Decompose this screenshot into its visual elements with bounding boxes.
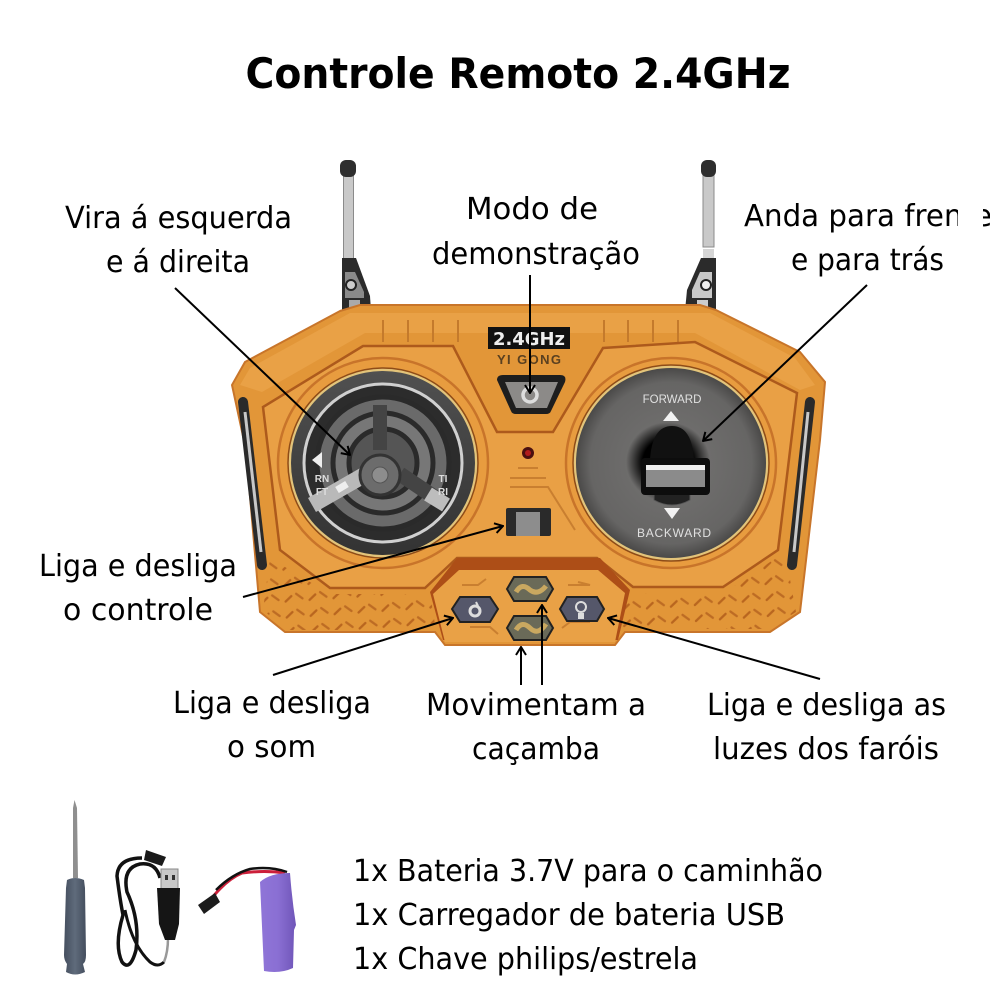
contents list: 1x Carregador de bateria USB [353, 898, 785, 933]
label: demo mode: Modo de [466, 192, 598, 227]
label: demo mode: demonstração [432, 237, 640, 272]
button: sound [452, 597, 498, 622]
right dial [566, 358, 776, 568]
label: bed [426, 688, 646, 767]
label: lights: Liga e desliga as [707, 688, 946, 723]
label: steering: e á direita [106, 245, 250, 280]
right dial: BACKWARD [637, 526, 711, 540]
label: bed: Movimentam a [426, 688, 646, 723]
arrow: demo mode [529, 275, 531, 393]
label: forward and backward: Anda para frente [744, 199, 992, 234]
illustration: remote control [232, 160, 825, 645]
label: lights [707, 688, 946, 767]
icon: usb charger cable [117, 850, 180, 965]
body [232, 305, 825, 645]
contents list: 1x Bateria 3.7V para o caminhão [353, 854, 823, 889]
label: forward and backward: e para trás [791, 243, 944, 278]
label: steering [65, 201, 292, 280]
button: bed up [507, 577, 553, 601]
demo button [497, 375, 565, 414]
left dial: FT [316, 487, 328, 498]
inner plate [263, 342, 797, 588]
display [488, 327, 570, 367]
arrow: power [243, 526, 503, 597]
left dial [278, 358, 488, 568]
display: YI GONG [497, 352, 561, 367]
right side bar [792, 402, 810, 565]
left dial: RN [315, 474, 329, 485]
label: sound: o som [227, 730, 316, 765]
left dial: RI [438, 487, 448, 498]
label: power [39, 549, 237, 628]
top grille marks [383, 320, 678, 342]
right antenna [685, 160, 716, 311]
label: power: Liga e desliga [39, 549, 237, 584]
contents list: 1x Chave philips/estrela [353, 942, 698, 977]
label: forward and backward [744, 198, 992, 278]
arrow: bed lower [520, 647, 522, 685]
icon: screwdriver [64, 800, 86, 974]
arrow: sound [273, 618, 453, 675]
arrow: steering [175, 288, 350, 455]
led [510, 447, 546, 478]
label: steering: Vira á esquerda [65, 201, 292, 236]
left side bar [243, 402, 262, 565]
button: bed down [507, 616, 553, 640]
tread right [622, 552, 796, 629]
label: lights: luzes dos faróis [713, 732, 939, 767]
power switch [506, 487, 575, 536]
arrow: lights [608, 618, 820, 679]
display: 2.4GHz [493, 329, 565, 350]
lower button panel [430, 558, 630, 642]
icon: battery [198, 868, 296, 972]
left antenna [340, 160, 371, 311]
right dial: FORWARD [643, 394, 701, 406]
label: demo mode [432, 192, 640, 272]
arrow: forward and backward [703, 285, 867, 441]
button: lights [560, 597, 604, 621]
top bevel [240, 313, 815, 392]
title: Controle Remoto 2.4GHz [246, 49, 790, 98]
tread left [263, 558, 436, 630]
left dial: TI [439, 474, 448, 485]
label: sound: Liga e desliga [173, 686, 371, 721]
arrow: bed upper [541, 605, 543, 685]
label: power: o controle [63, 593, 213, 628]
label: sound [173, 686, 371, 765]
label: bed: caçamba [472, 732, 600, 767]
contents list [353, 854, 823, 977]
